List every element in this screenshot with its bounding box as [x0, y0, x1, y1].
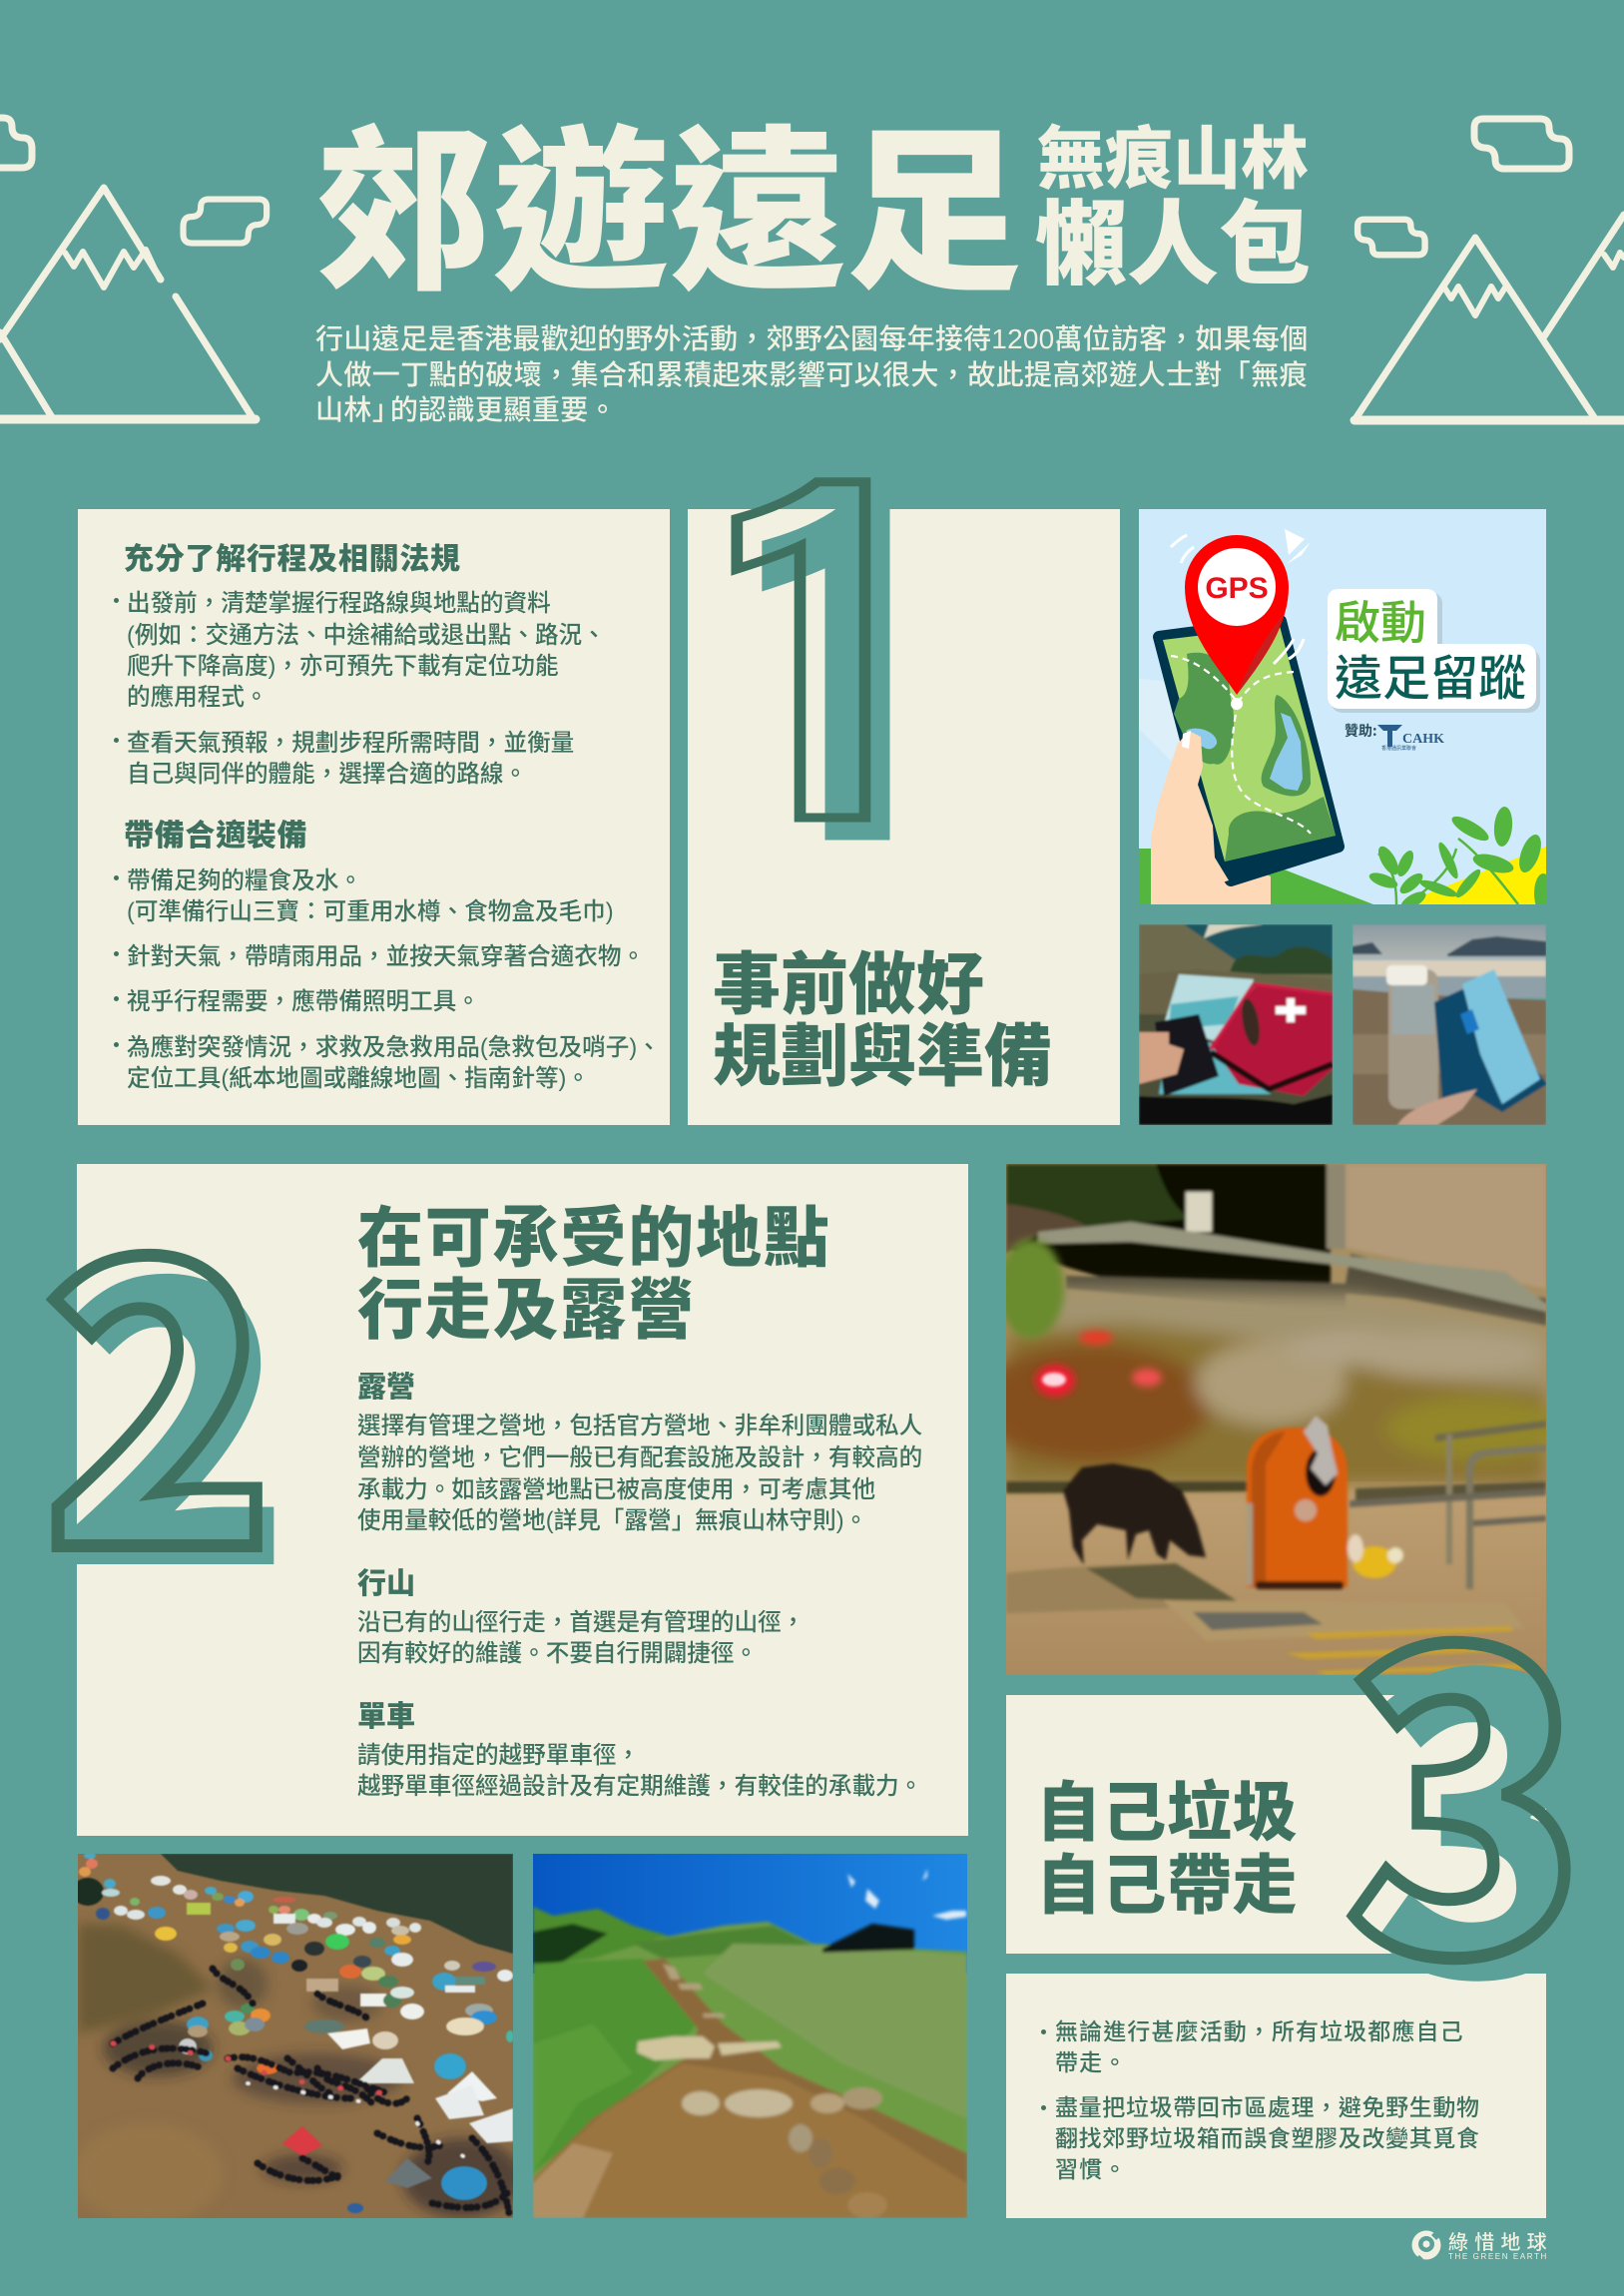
- text block: hiking: 行山: [357, 1568, 415, 1600]
- list: itinerary bullets: 自己與同伴的體能，選擇合適的路線。: [127, 762, 527, 788]
- sponsor: 香港通訊業聯會: [1381, 745, 1416, 752]
- text block: camping: 使用量較低的營地(詳見「露營」無痕山林守則)。: [357, 1508, 867, 1534]
- heading: equipment: 帶備合適裝備: [124, 820, 307, 853]
- list: rubbish bullets: 習慣。: [1055, 2156, 1127, 2182]
- logo: The Green Earth: [1411, 2230, 1553, 2261]
- illustration: GPS hiking tracker: [1139, 509, 1546, 904]
- list: rubbish bullets: [1041, 2018, 1480, 2182]
- list: rubbish bullets: 無論進行甚麼活動，所有垃圾都應自己: [1055, 2018, 1464, 2044]
- big numerals overlay: [46, 477, 1571, 1982]
- list: itinerary bullets: 的應用程式。: [127, 685, 269, 711]
- numeral 3: 3: [1367, 1501, 1609, 2094]
- panel: section 3 title: [1006, 1695, 1546, 1954]
- numeral 1: 1: [699, 452, 999, 913]
- panel: section 1 title: [688, 509, 1120, 1125]
- heading: section 3: [1036, 1776, 1298, 1922]
- list: equipment bullets: (可準備行山三寶：可重用水樽、食物盒及毛巾): [127, 899, 614, 925]
- leaves: [1367, 806, 1552, 913]
- intro paragraph: [315, 323, 1308, 425]
- list: equipment bullets: 針對天氣，帶晴雨用品，並按天氣穿著合適衣物。: [127, 944, 645, 970]
- list: equipment bullets: 視乎行程需要，應帶備照明工具。: [127, 989, 480, 1015]
- heading: section 3: 自己垃圾: [1036, 1776, 1298, 1849]
- text block: camping: 露營: [357, 1372, 415, 1404]
- list: rubbish bullets: 帶走。: [1055, 2049, 1127, 2075]
- heading: section 2: [357, 1201, 831, 1347]
- intro paragraph: 人做一丁點的破壞，集合和累積起來影響可以很大，故此提高郊遊人士對「無痕: [315, 359, 1308, 390]
- numeral 2: 2: [60, 1120, 293, 1675]
- photo: crowded campsite: [78, 1854, 513, 2218]
- title: subtitle line 1: 無痕山林: [1037, 122, 1309, 198]
- list: itinerary bullets: 爬升下降高度)，亦可預先下載有定位功能: [127, 654, 559, 680]
- logo name: 綠惜地球: [1448, 2232, 1553, 2254]
- list: equipment bullets: 定位工具(紙本地圖或離線地圖、指南針等)。: [127, 1066, 590, 1092]
- text block: cycling: 越野單車徑經過設計及有定期維護，有較佳的承載力。: [357, 1774, 922, 1800]
- heading: section 3: 自己帶走: [1036, 1849, 1298, 1922]
- heading: section 1: [713, 947, 1052, 1095]
- text block: hiking: [357, 1568, 805, 1667]
- sponsor: [1345, 721, 1444, 752]
- heading: section 1: 規劃與準備: [713, 1019, 1052, 1095]
- text block: cycling: 單車: [357, 1701, 415, 1733]
- intro paragraph: 行山遠足是香港最歡迎的野外活動，郊野公園每年接待1200萬位訪客，如果每個: [315, 323, 1308, 354]
- GPS pin: [1185, 535, 1289, 695]
- panel: section 2 content: [77, 1164, 968, 1836]
- photo: water bottle and food pouch on the beach: [1353, 924, 1546, 1125]
- title: main: 郊遊遠足: [315, 115, 1022, 312]
- panel: section 3 bullets: [1006, 1974, 1546, 2218]
- heading: section 1: 事前做好: [713, 947, 984, 1023]
- callout bubble: 遠足留蹤: [1335, 639, 1526, 709]
- photo: eroded hiking trail: [533, 1854, 967, 2218]
- logo tagline: THE GREEN EARTH: [1448, 2252, 1548, 2261]
- text block: camping: [357, 1372, 922, 1534]
- photo: map, first-aid kit and power bank: [1139, 924, 1333, 1125]
- hand: [1151, 731, 1229, 904]
- photo: wild boar at a rubbish bin: [1006, 1164, 1546, 1675]
- list: equipment bullets: 帶備足夠的糧食及水。: [127, 868, 362, 894]
- heading: itinerary: 充分了解行程及相關法規: [124, 543, 461, 576]
- list: rubbish bullets: 盡量把垃圾帶回市區處理，避免野生動物: [1055, 2094, 1480, 2120]
- phone: [1159, 621, 1339, 880]
- text block: cycling: 請使用指定的越野單車徑，: [357, 1743, 640, 1769]
- list: equipment bullets: [114, 867, 661, 1092]
- callout bubble: [1328, 587, 1540, 713]
- heading: section 2: 在可承受的地點: [357, 1201, 831, 1275]
- list: itinerary bullets: 查看天氣預報，規劃步程所需時間，並衡量: [127, 731, 574, 757]
- intro paragraph: 山林」的認識更顯重要。: [315, 394, 617, 425]
- sponsor: 贊助:: [1345, 721, 1377, 741]
- list: itinerary bullets: (例如：交通方法、中途補給或退出點、路況、: [127, 623, 606, 649]
- list: rubbish bullets: 翻找郊野垃圾箱而誤食塑膠及改變其覓食: [1055, 2125, 1480, 2151]
- text block: hiking: 沿已有的山徑行走，首選是有管理的山徑，: [357, 1610, 805, 1636]
- numeral 3: 3: [1345, 1478, 1586, 2071]
- title: subtitle line 2: 懶人包: [1035, 195, 1311, 296]
- header decoration: left mountains and clouds: [0, 114, 270, 423]
- text block: camping: 承載力。如該露營地點已被高度使用，可考慮其他: [357, 1477, 875, 1503]
- text block: cycling: [357, 1701, 922, 1800]
- header decoration: right mountains and clouds: [1350, 116, 1624, 425]
- sponsor: CAHK: [1402, 732, 1444, 747]
- numeral 1: [731, 477, 890, 841]
- list: itinerary bullets: 出發前，清楚掌握行程路線與地點的資料: [127, 591, 551, 617]
- text block: camping: 選擇有管理之營地，包括官方營地、非牟利團體或私人: [357, 1414, 922, 1439]
- text block: hiking: 因有較好的維護。不要自行開闢捷徑。: [357, 1641, 758, 1667]
- text block: camping: 營辦的營地，它們一般已有配套設施及設計，有較高的: [357, 1445, 922, 1471]
- heading: section 2: 行走及露營: [357, 1273, 696, 1347]
- list: equipment bullets: 為應對突發情況，求救及急救用品(急救包及哨子)、: [127, 1035, 661, 1061]
- list: itinerary bullets: [114, 591, 606, 788]
- icon: logo mark: [1411, 2230, 1441, 2260]
- callout bubble: 啟動: [1335, 587, 1426, 653]
- numeral 2: 2: [42, 1102, 275, 1657]
- pin label: GPS: [1205, 572, 1269, 605]
- panel: planning checklist: [78, 509, 670, 1125]
